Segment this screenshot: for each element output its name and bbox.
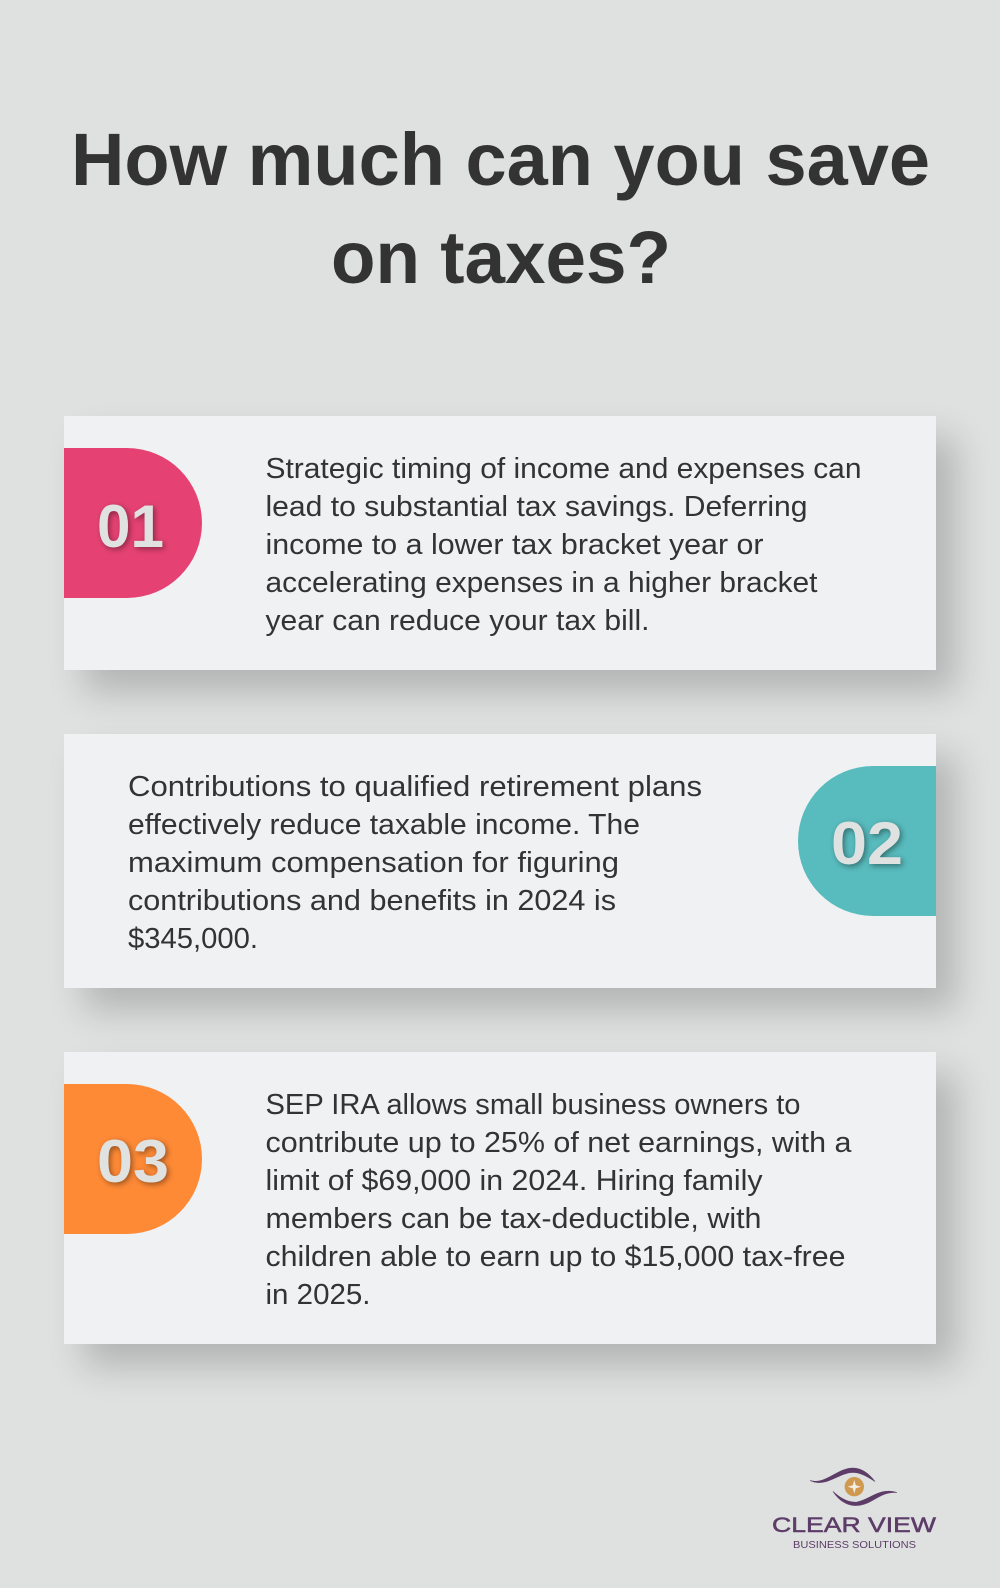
badge 02 xyxy=(798,766,936,916)
logo tagline: BUSINESS SOLUTIONS xyxy=(793,1540,916,1551)
text block: card 03: limit of $69,000 in 2024. Hiring family xyxy=(266,1165,763,1197)
text block: card 01: year can reduce your tax bill. xyxy=(266,605,650,637)
text block: card 02: $345,000. xyxy=(128,923,258,955)
icon: eye xyxy=(810,1468,897,1506)
title: How much can you save xyxy=(71,118,930,201)
badge 03 xyxy=(64,1084,202,1234)
logo wordmark: CLEAR VIEW xyxy=(772,1514,936,1537)
number 03: 03 xyxy=(97,1128,169,1195)
text block: card 02: Contributions to qualified retirement plans xyxy=(128,771,702,803)
text block: card 01: accelerating expenses in a higher bracket xyxy=(266,567,818,599)
text block: card 03: SEP IRA allows small business owners to xyxy=(266,1089,800,1121)
title: on taxes? xyxy=(331,216,671,299)
text block: card 03: children able to earn up to $15,000 tax-free xyxy=(266,1241,846,1273)
text block: card 03: contribute up to 25% of net earnings, with a xyxy=(266,1127,852,1159)
text block: card 02: maximum compensation for figuring xyxy=(128,847,619,879)
panel: card 03 xyxy=(64,1052,936,1344)
number 01: 01 xyxy=(97,493,164,560)
panel: card 01 xyxy=(64,416,936,670)
text block: card 01: lead to substantial tax savings. Deferring xyxy=(266,491,808,523)
text block: card 03: members can be tax-deductible, with xyxy=(266,1203,762,1235)
text block: card 02: contributions and benefits in 2024 is xyxy=(128,885,616,917)
title xyxy=(71,118,930,299)
text block: card 03: in 2025. xyxy=(266,1279,370,1311)
text block: card 02: effectively reduce taxable income. The xyxy=(128,809,640,841)
number 02: 02 xyxy=(831,810,903,877)
text block: card 01: Strategic timing of income and expenses can xyxy=(266,453,862,485)
panel: card 02 xyxy=(64,734,936,988)
badge 01 xyxy=(64,448,202,598)
text block: card 01: income to a lower tax bracket year or xyxy=(266,529,764,561)
